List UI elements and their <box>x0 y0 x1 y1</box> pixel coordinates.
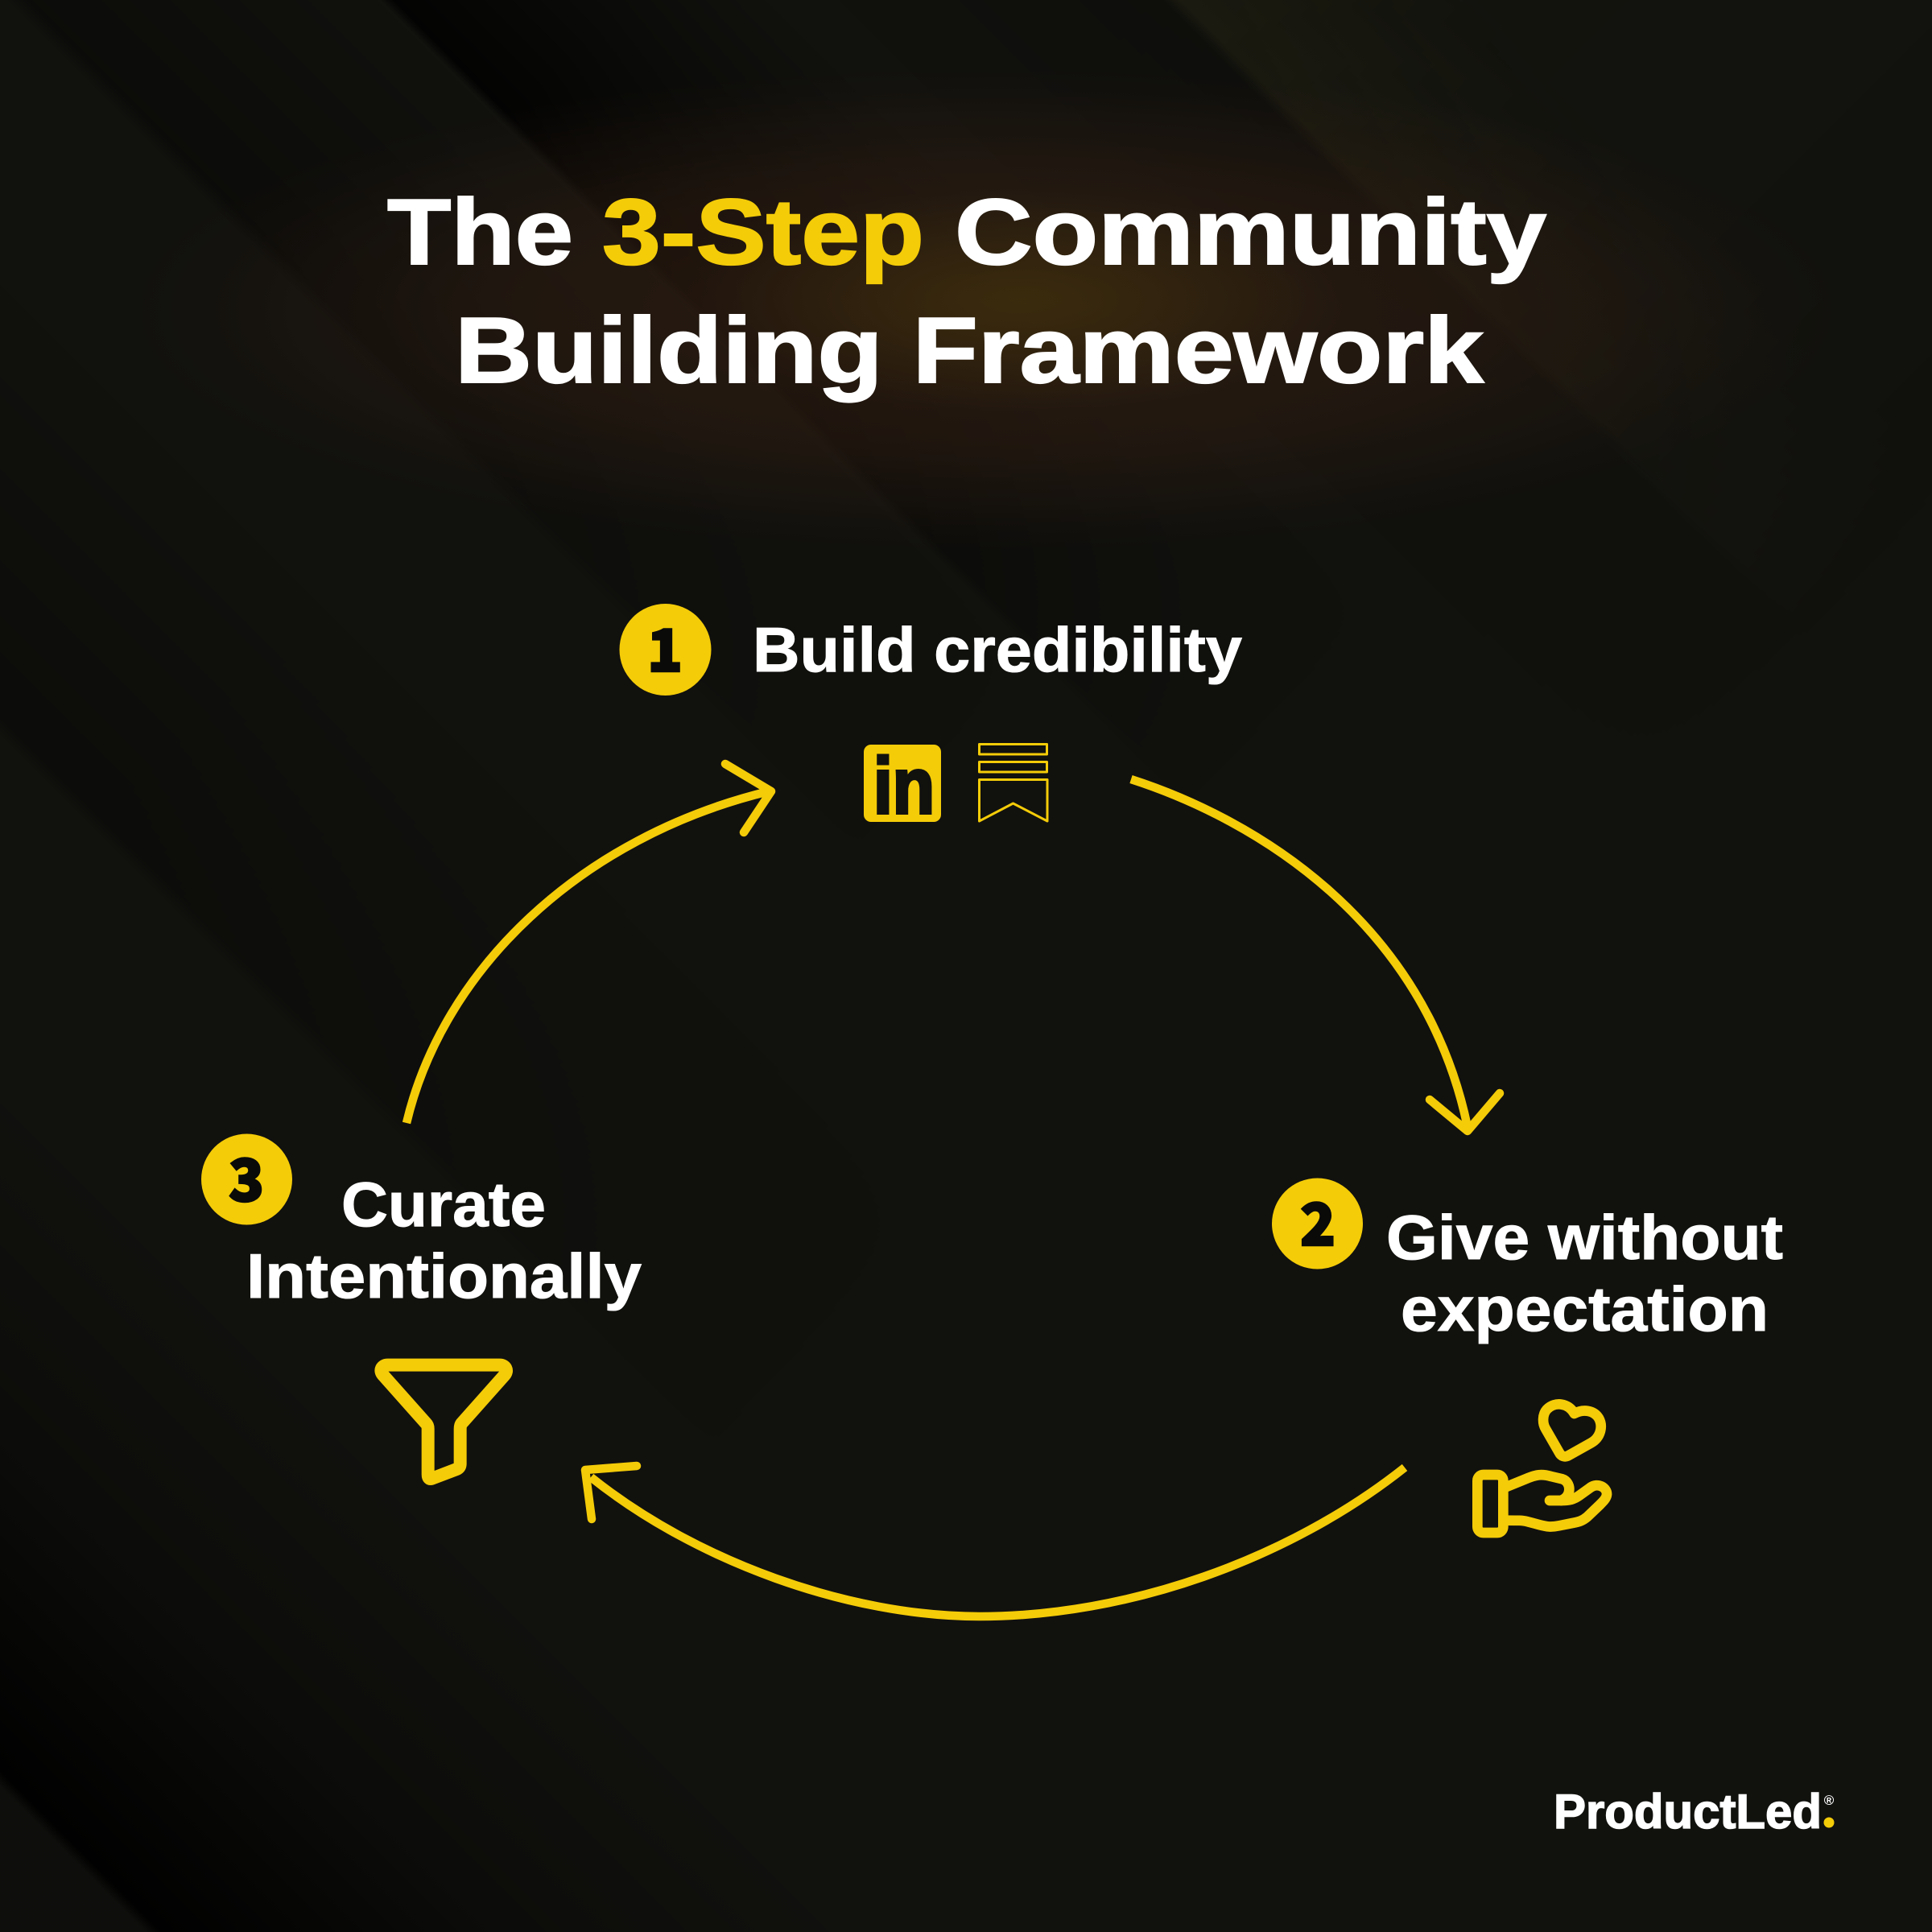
step 2: number badge and label <box>1272 1178 1783 1344</box>
logo: ProductLed: ® <box>1824 1793 1835 1808</box>
icon: hand with heart <box>1477 1404 1607 1533</box>
step 3: number badge and label <box>201 1133 642 1311</box>
label: curate intentionally <box>246 1169 642 1311</box>
icon: funnel <box>381 1365 506 1479</box>
title: 3-Step <box>602 180 924 284</box>
icon: substack bookmark <box>979 744 1047 821</box>
icon: linkedin: in <box>873 741 935 830</box>
badge 3: 3 <box>229 1133 264 1218</box>
badge 1: 1 <box>647 604 683 688</box>
title: The <box>387 180 573 284</box>
badge 2: 2 <box>1300 1178 1335 1262</box>
label: give without expectation: expectation <box>1401 1274 1769 1344</box>
title <box>387 180 1546 402</box>
logo: ProductLed: ProductLed <box>1554 1785 1822 1839</box>
badge 2 <box>1272 1178 1363 1269</box>
arrow: step 1 to step 2 <box>1131 779 1500 1131</box>
arrow: step 2 to step 3 <box>585 1466 1405 1616</box>
label: curate intentionally: Curate <box>341 1169 546 1240</box>
label: curate intentionally: Intentionally <box>246 1241 642 1311</box>
badge 1 <box>620 604 712 696</box>
label: give without expectation <box>1386 1202 1783 1344</box>
label: build credibility: Build credibility <box>753 614 1242 685</box>
title: Community <box>955 180 1546 284</box>
label: give without expectation: Give without <box>1386 1202 1783 1273</box>
arrow: step 3 to step 1 <box>407 764 771 1123</box>
step 1: number badge and label <box>620 604 1242 696</box>
badge 3 <box>201 1133 292 1225</box>
title: Building Framework <box>455 298 1484 402</box>
